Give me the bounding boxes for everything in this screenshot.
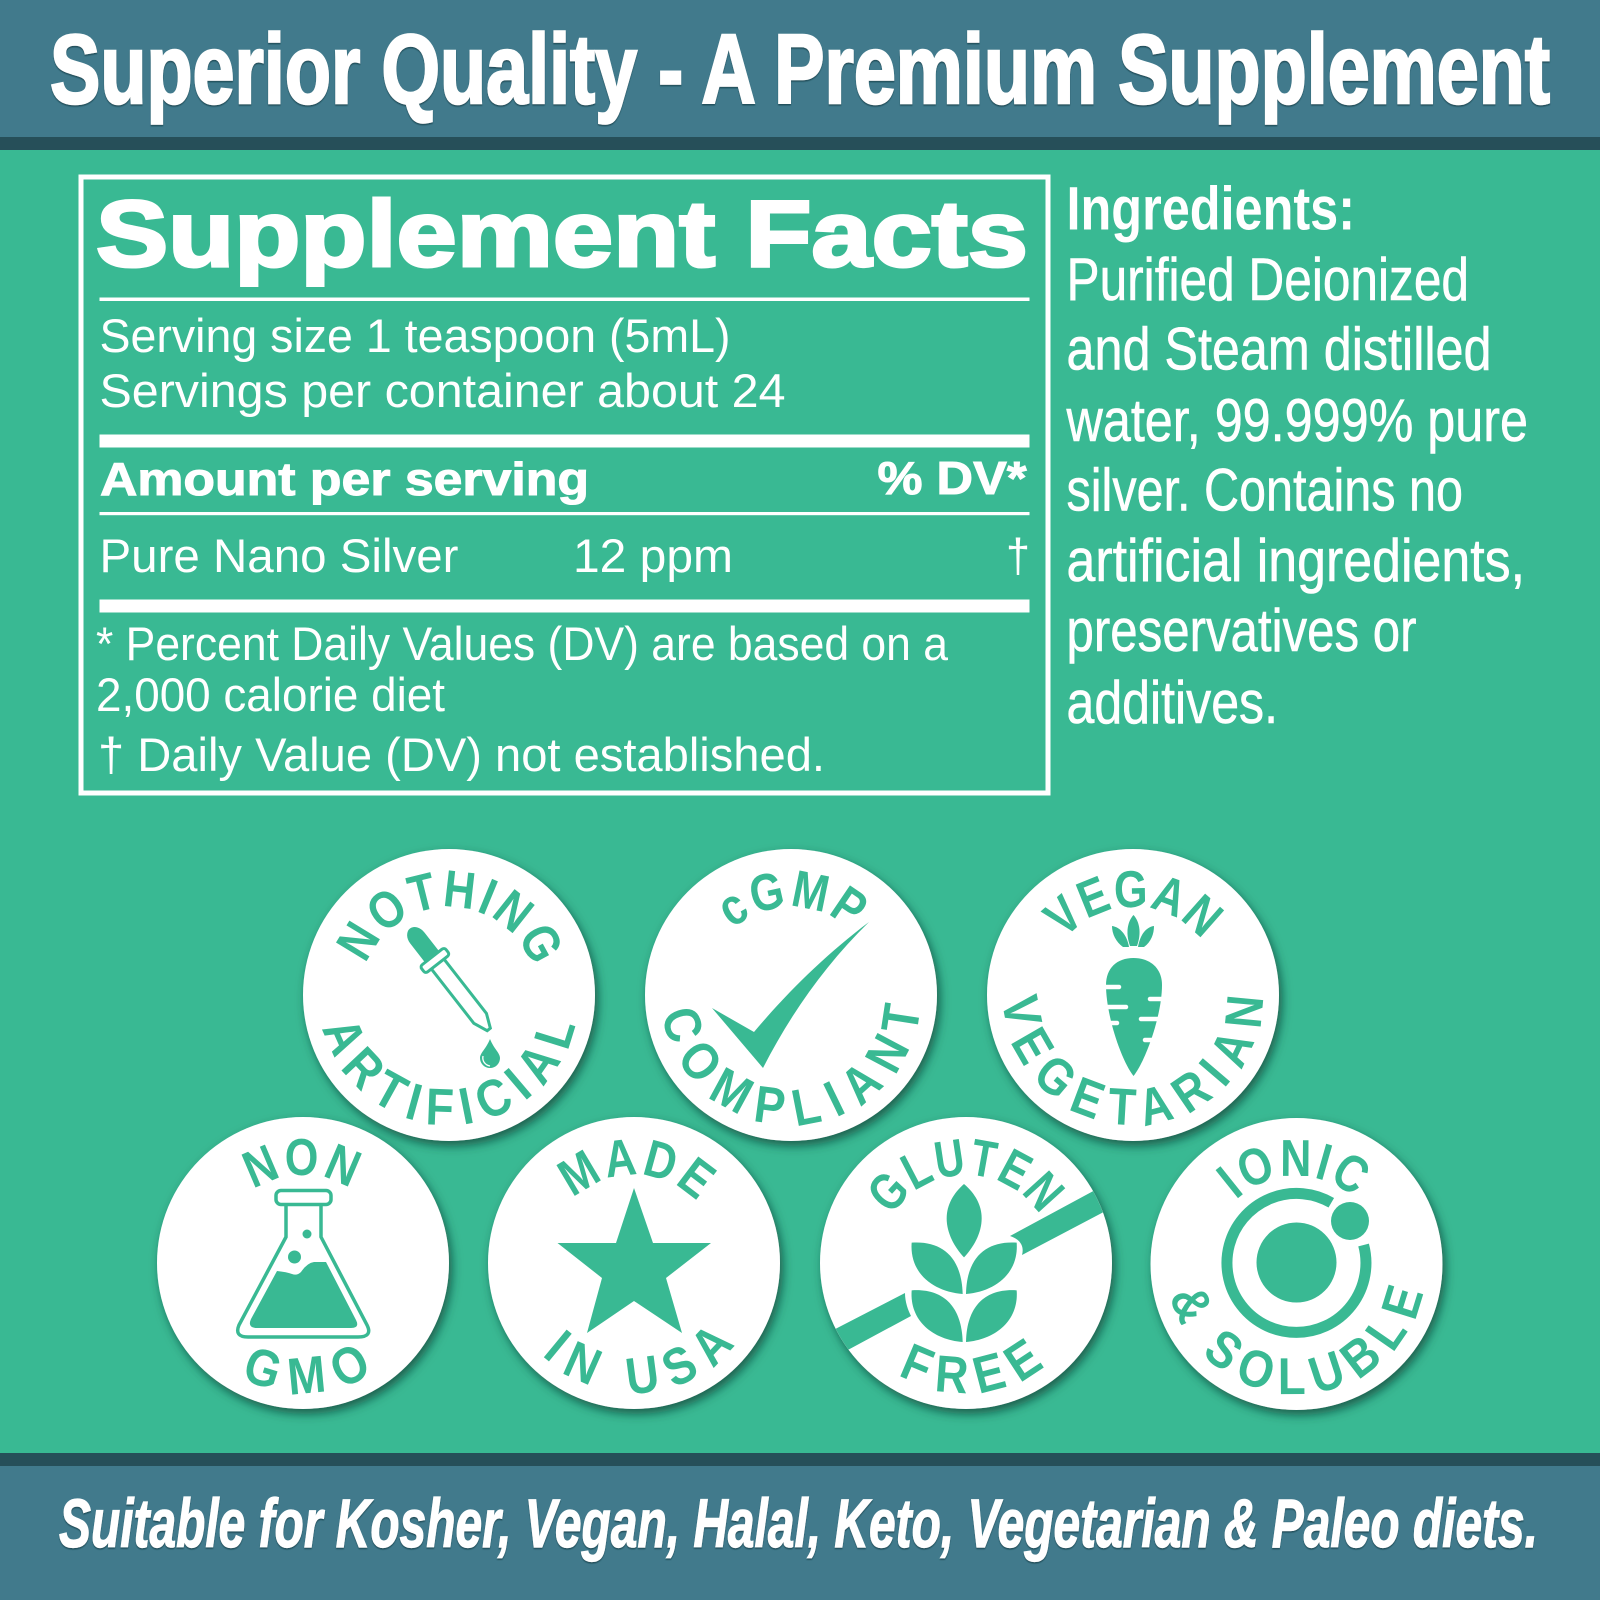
heading: supplement facts: Supplement Facts <box>96 181 1028 286</box>
ingredients text block: silver. Contains no <box>1066 456 1463 524</box>
panel: supplement facts <box>81 177 1048 793</box>
badge text: ionic: IONIC <box>1216 1140 1368 1198</box>
badge text: gluten: GLUTEN <box>870 1138 1066 1212</box>
icon: dropper <box>398 919 501 1039</box>
footnote: calorie diet: 2,000 calorie diet <box>96 668 445 721</box>
servings per container: Servings per container about 24 <box>100 364 786 417</box>
ingredients heading: Ingredients: <box>1066 174 1355 242</box>
ingredients text block <box>1066 174 1528 736</box>
ingredients text block: artificial ingredients, <box>1066 527 1525 594</box>
header band <box>0 0 1600 150</box>
badge: gluten free <box>817 1116 1121 1420</box>
ingredients text block: preservatives or <box>1066 597 1416 664</box>
badge: ionic and soluble <box>1148 1116 1452 1421</box>
badge text: made: MADE <box>556 1140 717 1200</box>
icon: check mark <box>712 922 869 1068</box>
icon: ion ring <box>1227 1193 1369 1332</box>
serving size: Serving size 1 teaspoon (5mL) <box>100 309 730 362</box>
footer band <box>0 1453 1600 1600</box>
icon: wheat <box>912 1184 1017 1342</box>
icon: drop <box>480 1039 500 1068</box>
ingredients text block: and Steam distilled <box>1066 316 1492 382</box>
badge text: nothing: NOTHING <box>336 870 560 962</box>
ingredients text block: Purified Deionized <box>1066 246 1469 313</box>
badge text: compliant: COMPLIANT <box>664 1002 919 1126</box>
footnote: daily value: † Daily Value (DV) not established. <box>98 728 825 781</box>
badge: made in usa <box>485 1116 789 1420</box>
ingredient amount: 12 ppm <box>573 529 733 582</box>
badge text: and soluble: & SOLUBLE <box>1172 1284 1424 1394</box>
badge text: non: NON <box>242 1138 362 1188</box>
badge text: gmo: GMO <box>246 1347 366 1395</box>
badge text: free: FREE <box>900 1338 1044 1394</box>
percent daily value header: % DV* <box>878 452 1027 504</box>
ingredients text block: additives. <box>1066 669 1278 736</box>
badge text: vegetarian: VEGETARIAN <box>1004 993 1264 1126</box>
badge text: cgmp: cGMP <box>722 870 866 924</box>
badge text: vegan: VEGAN <box>1040 870 1224 938</box>
badge text: artificial: ARTIFICIAL <box>322 1024 576 1125</box>
amount per serving: Amount per serving <box>100 453 589 505</box>
icon: star <box>558 1188 711 1333</box>
icon: flask <box>238 1190 369 1337</box>
badge text: in usa: IN USA <box>544 1330 735 1394</box>
badge: non gmo <box>154 1116 458 1420</box>
badge: cgmp compliant <box>642 848 946 1152</box>
badge: vegan vegetarian <box>984 848 1288 1152</box>
icon: crossed stripe <box>836 1191 1103 1350</box>
footnote: percent daily values: * Percent Daily Values (DV) are based on a <box>96 617 949 670</box>
badge: nothing artificial <box>300 848 604 1152</box>
dagger: † <box>1006 529 1030 582</box>
ingredient name: Pure Nano Silver <box>100 529 458 582</box>
icon: carrot <box>1104 915 1163 1076</box>
